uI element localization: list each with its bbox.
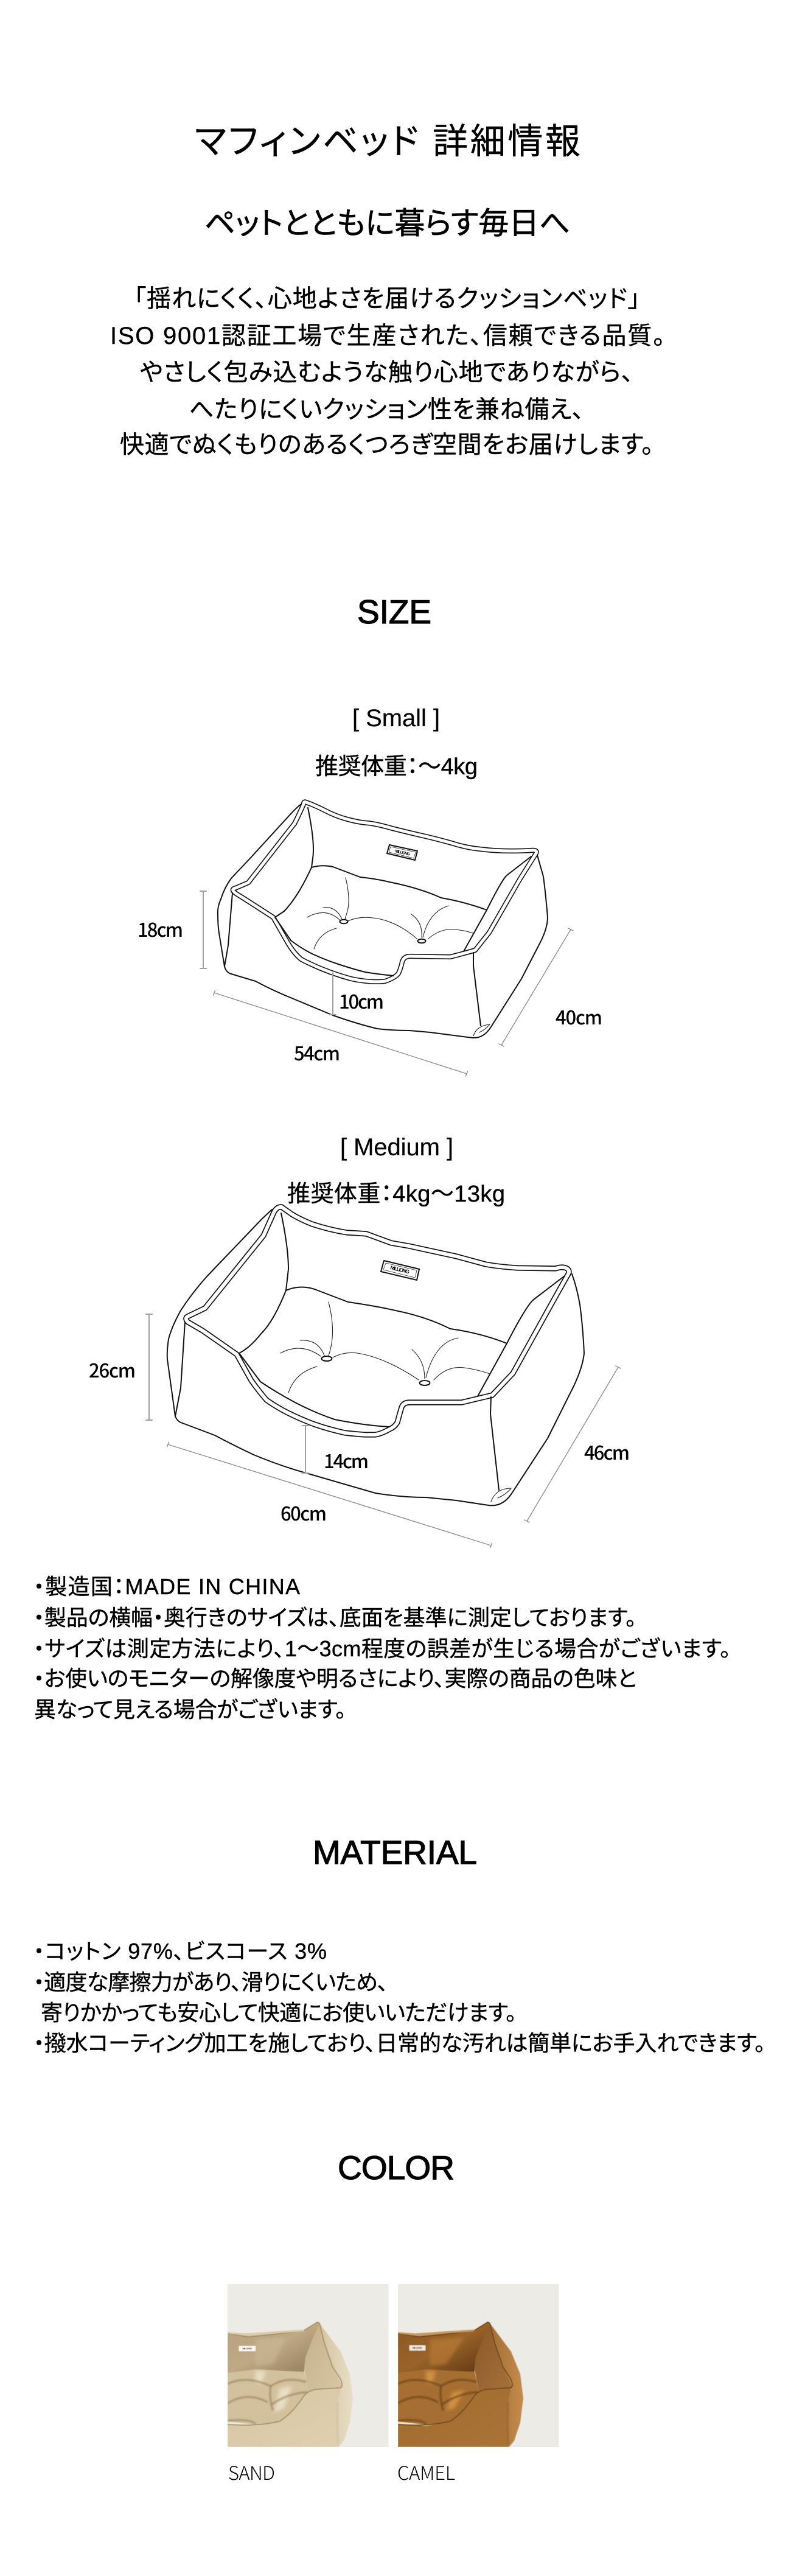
cushion creases	[228, 2380, 307, 2424]
dimension line: depth 40cm	[499, 928, 573, 1046]
rim piping	[233, 802, 537, 982]
cushion tufting	[281, 1302, 490, 1393]
front panel	[398, 2388, 511, 2447]
dimension line: width 60cm	[167, 1442, 492, 1548]
corner leaf seam	[473, 1024, 490, 1036]
photo: camel bed	[398, 2284, 559, 2447]
intro text block	[110, 285, 665, 458]
dimension labels: small bed: 18cm	[138, 915, 183, 942]
material text block: ・コットン 97%、ビスコース 3%	[33, 1939, 327, 1964]
heading: SIZE: SIZE	[357, 593, 431, 631]
dimension labels: medium bed: 26cm	[89, 1356, 136, 1383]
size label: Small: [ Small ]	[352, 705, 440, 732]
sewn label patch: MILLIONG	[390, 1264, 410, 1275]
dimension labels: small bed: 54cm	[294, 1038, 340, 1066]
rim piping	[186, 1207, 569, 1435]
diagram: small bed line drawing	[200, 802, 573, 1076]
dimension line: depth 46cm	[524, 1366, 621, 1522]
material text block: ・撥水コーティング加工を施しており、日常的な汚れは簡単にお手入れできます。	[33, 2031, 765, 2056]
diagram: medium bed line drawing	[146, 1207, 621, 1548]
dimension labels: small bed: 10cm	[339, 987, 384, 1014]
size notes text block: ・お使いのモニターの解像度や明るさにより、実際の商品の色味と	[33, 1666, 636, 1691]
cushion	[398, 2370, 479, 2424]
top lip highlight	[228, 2329, 304, 2336]
dimension line: width 54cm	[213, 990, 467, 1076]
inner side wall	[475, 2323, 513, 2392]
inner wall and cushion edges	[225, 808, 531, 1026]
tag	[409, 2345, 425, 2351]
swatch label: CAMEL: CAMEL	[397, 2458, 455, 2485]
dimension labels: medium bed: 46cm	[584, 1438, 630, 1465]
top lip highlight	[398, 2329, 475, 2336]
outer side panel	[319, 2323, 353, 2447]
front panel right fold	[337, 2403, 338, 2445]
photo: sand bed	[228, 2284, 389, 2447]
tag	[239, 2346, 256, 2351]
inner wall and cushion edges	[175, 1213, 565, 1490]
swatch label: SAND: SAND	[228, 2458, 275, 2485]
sewn label patch: MILLIONG	[395, 849, 410, 857]
back wall	[228, 2322, 319, 2373]
title: マフィンベッド 詳細情報	[195, 122, 580, 161]
dimension line: height 26cm	[146, 1314, 152, 1420]
cushion highlights	[256, 2371, 292, 2412]
cushion buttons	[340, 920, 426, 943]
piping	[228, 2322, 342, 2425]
tag: MILLIONG	[413, 2347, 422, 2350]
inner side wall	[304, 2323, 343, 2392]
dimension labels: medium bed: 60cm	[281, 1499, 327, 1526]
outer side panel	[490, 2323, 523, 2447]
dimension line: front 10cm	[330, 973, 336, 1015]
sewn label patch	[387, 845, 417, 860]
material text block	[33, 1939, 765, 2056]
cushion tufting	[307, 878, 473, 949]
subtitle: ペットとともに暮らす毎日へ	[204, 206, 570, 240]
piping	[398, 2322, 512, 2425]
recommended weight: Medium: 推奨体重：4kg〜13kg	[287, 1181, 505, 1207]
material text block: 寄りかかっても安心して快適にお使いいただけます。	[41, 2000, 517, 2025]
size notes text block: 異なって見える場合がございます。	[34, 1697, 346, 1722]
back wall light patches	[256, 2339, 283, 2365]
intro text block: へたりにくいクッション性を兼ね備え、	[189, 396, 584, 423]
size notes text block	[33, 1574, 731, 1722]
size notes text block: ・製造国：MADE IN CHINA	[33, 1574, 300, 1599]
material text block: ・適度な摩擦力があり、滑りにくいため、	[33, 1970, 388, 1995]
dimension labels: small bed	[138, 915, 602, 1066]
size notes text block: ・サイズは測定方法により、1〜3cm程度の誤差が生じる場合がございます。	[33, 1636, 731, 1661]
cushion highlights	[426, 2371, 464, 2410]
front panel	[228, 2388, 341, 2447]
intro text block: やさしく包み込むような触り心地でありながら、	[140, 359, 633, 386]
sewn label patch	[381, 1261, 419, 1280]
heading: COLOR: COLOR	[338, 2149, 455, 2186]
heading: MATERIAL: MATERIAL	[313, 1833, 477, 1871]
bed outer body outline	[218, 804, 548, 1038]
back wall	[398, 2322, 490, 2373]
back wall light patches	[430, 2337, 464, 2366]
front panel right fold	[507, 2403, 509, 2445]
intro text block: 「揺れにくく、心地よさを届けるクッションベッド」	[134, 285, 640, 312]
dimension labels: small bed: 40cm	[556, 1003, 602, 1030]
size label: Medium: [ Medium ]	[340, 1134, 453, 1161]
dimension labels: medium bed	[89, 1356, 630, 1526]
corner leaf seam	[491, 1488, 511, 1502]
dimension line: front 14cm	[302, 1426, 308, 1473]
recommended weight: Small: 推奨体重：〜4kg	[315, 754, 478, 780]
tag: MILLIONG	[242, 2347, 252, 2350]
cushion buttons	[321, 1356, 430, 1385]
dimension labels: medium bed: 14cm	[324, 1446, 369, 1474]
bed outer body outline	[167, 1209, 584, 1505]
dimension line: height 18cm	[200, 891, 206, 968]
cushion	[228, 2370, 308, 2424]
size notes text block: ・製品の横幅・奥行きのサイズは、底面を基準に測定しております。	[33, 1605, 636, 1630]
cushion creases	[398, 2380, 478, 2424]
intro text block: ISO 9001認証工場で生産された、信頼できる品質。	[110, 323, 665, 349]
intro text block: 快適でぬくもりのあるくつろぎ空間をお届けします。	[120, 432, 653, 458]
